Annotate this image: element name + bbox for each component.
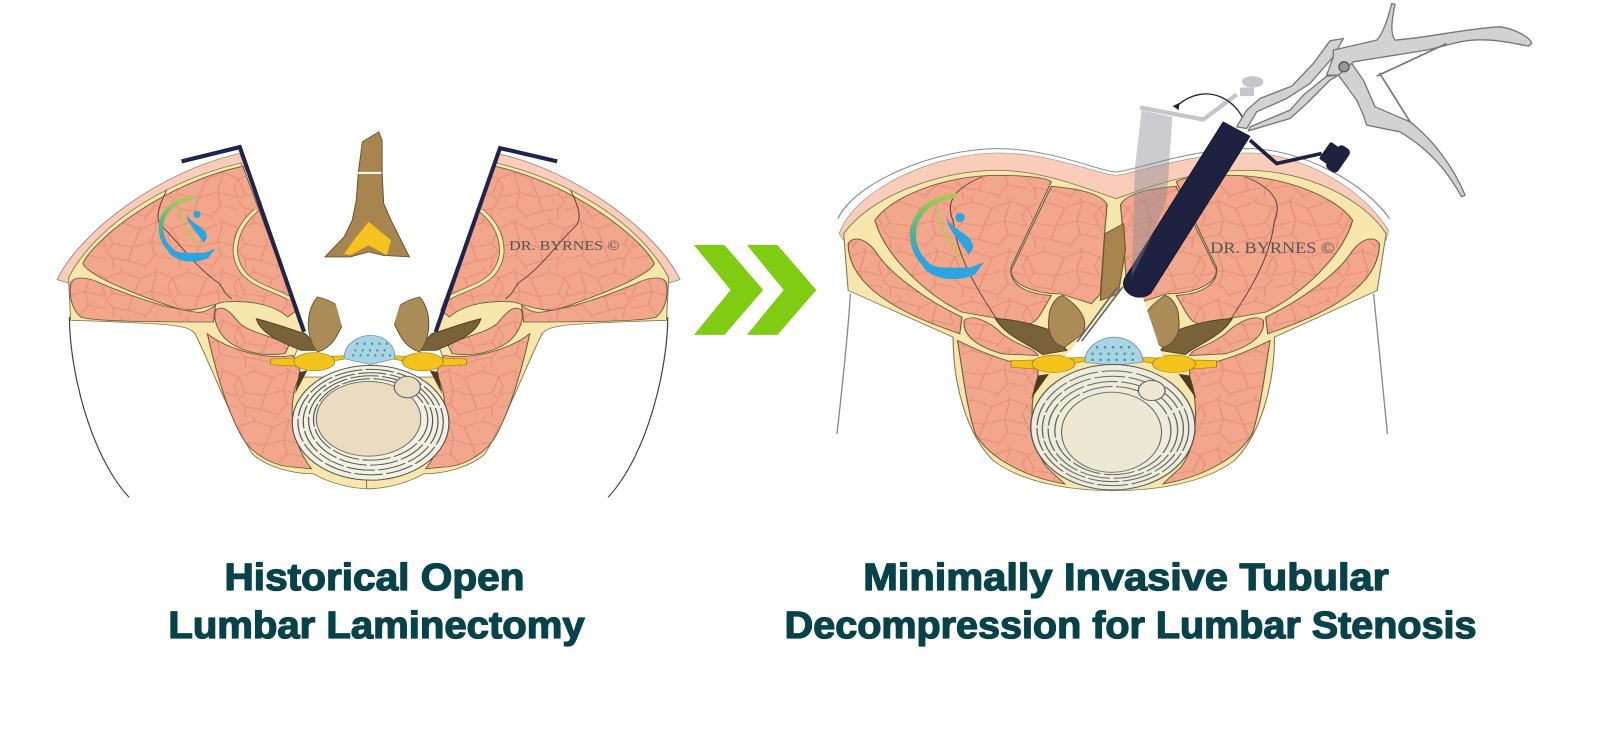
disc nucleus	[316, 381, 421, 456]
surgical corridor	[1065, 287, 1163, 357]
body contour left	[837, 294, 850, 434]
rongeur instrument	[1237, 3, 1532, 197]
rongeur upper handle	[1327, 3, 1532, 75]
fat layer	[844, 170, 1386, 491]
psoas muscle	[207, 334, 311, 469]
removed spinous process	[325, 132, 409, 257]
mirrored right half of anatomy	[1120, 175, 1379, 484]
lateral muscle	[70, 278, 216, 322]
vertebral disc	[292, 365, 449, 480]
fascia loop outline	[235, 210, 290, 299]
spinal cord	[1085, 337, 1143, 366]
left half of anatomy	[57, 154, 371, 497]
fascia loop	[235, 210, 290, 299]
logo left	[159, 196, 215, 262]
multifidus outer muscle	[875, 175, 1051, 324]
rongeur pivot	[1339, 62, 1349, 72]
disc bulge	[394, 376, 420, 398]
inner muscle	[964, 318, 1038, 356]
watermark left: DR. BYRNES ©	[509, 238, 619, 253]
working tube arm	[1250, 140, 1322, 163]
chevron arrow	[694, 245, 816, 335]
rongeur lower handle	[1338, 63, 1465, 197]
ghost tube knob	[1240, 76, 1263, 96]
ghost tube previous position	[1132, 110, 1172, 277]
central septum	[1108, 200, 1120, 227]
skin layer	[57, 154, 246, 284]
diagram: minimally invasive tubular decompression	[837, 122, 1390, 491]
rongeur shaft upper	[1237, 38, 1343, 128]
vertebral disc	[1031, 365, 1195, 490]
medial muscle	[1011, 186, 1107, 304]
diagram: historical open laminectomy	[57, 132, 680, 497]
instrument assembly	[1132, 3, 1532, 277]
left half of anatomy	[848, 175, 1107, 484]
left retractor blade	[182, 147, 304, 332]
rongeur spring	[1377, 43, 1447, 122]
rongeur shaft tips	[1077, 287, 1123, 342]
facet bone	[308, 297, 346, 352]
psoas muscle	[958, 340, 1065, 484]
spinous process remnant	[1100, 224, 1125, 300]
title right: Minimally Invasive Tubular	[863, 556, 1389, 598]
ghost tube arm	[1140, 94, 1237, 119]
muscle boundary	[158, 190, 232, 299]
title left: Lumbar Laminectomy	[168, 604, 585, 646]
rongeur shaft lower	[1248, 75, 1338, 131]
working tube knob	[1317, 138, 1352, 174]
inner muscle	[215, 308, 289, 355]
working tube	[1123, 122, 1250, 297]
nerve root	[271, 353, 344, 371]
erector spinae muscle	[83, 166, 296, 317]
title left: Historical Open	[224, 556, 524, 598]
outer body contour	[69, 317, 129, 497]
disc nucleus	[1062, 392, 1162, 472]
lamina bone	[256, 319, 322, 350]
dark ligament	[295, 370, 307, 394]
right retractor blade	[436, 148, 557, 332]
mirrored right half of anatomy	[367, 154, 680, 497]
rotation arrow	[1173, 94, 1247, 128]
spinal cord	[344, 335, 395, 364]
outer skin line	[838, 149, 1390, 219]
watermark right: DR. BYRNES ©	[1210, 240, 1335, 257]
disc bulge	[1138, 381, 1165, 401]
fat layer	[69, 163, 371, 489]
title left	[168, 556, 585, 646]
title right: Decompression for Lumbar Stenosis	[785, 604, 1477, 646]
nerve root	[1011, 355, 1085, 373]
lamina bone	[995, 319, 1067, 355]
body contour right	[1374, 294, 1387, 434]
lateral muscle	[848, 239, 962, 334]
facet bone	[1048, 295, 1085, 347]
surgical opening	[322, 254, 416, 334]
title right	[785, 556, 1477, 646]
skin layer	[839, 153, 1388, 240]
logo right	[910, 193, 984, 279]
dark ligament	[1031, 374, 1049, 399]
muscle boundary	[950, 177, 1002, 327]
